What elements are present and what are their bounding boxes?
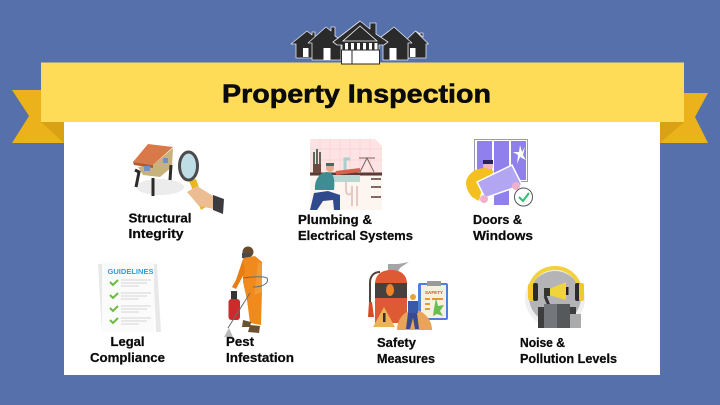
icon: row of houses with shop (291, 21, 428, 64)
icon: house and magnifier (133, 144, 224, 214)
title: Property Inspection (222, 78, 491, 108)
label: Integrity (128, 227, 184, 241)
panel item: safety measures (368, 262, 448, 366)
label: Plumbing & (298, 213, 372, 227)
icon: guidelines checklist: GUIDELINES (108, 267, 154, 276)
label: Windows (473, 229, 533, 243)
label: Pest (226, 335, 255, 349)
panel item: pest infestation (224, 246, 294, 365)
icon: man carrying window (466, 140, 532, 206)
icon: extinguisher and clipboard: SAFETY (425, 290, 443, 295)
label: Electrical Systems (298, 229, 413, 243)
panel item: legal compliance (90, 262, 165, 365)
panel item: plumbing and electrical (298, 139, 413, 243)
panel item: noise and pollution (520, 268, 617, 366)
label: Infestation (226, 351, 294, 365)
label: Pollution Levels (520, 352, 617, 366)
icon: headphones, megaphone, city (525, 268, 585, 328)
panel item: structural integrity (128, 144, 224, 241)
label: Compliance (90, 351, 165, 365)
icon: exterminator with sprayer (224, 246, 267, 337)
white content panel (64, 122, 660, 375)
right ribbon tail (660, 93, 708, 143)
label: Legal (110, 335, 144, 349)
label: Doors & (473, 213, 522, 227)
left ribbon tail (12, 90, 64, 143)
title banner (41, 62, 684, 122)
label: Measures (377, 352, 435, 366)
icon: plumber at sink (310, 139, 382, 210)
label: Safety (377, 336, 416, 350)
label: Structural (128, 211, 192, 225)
panel item: doors and windows (466, 140, 533, 243)
label: Noise & (520, 336, 565, 350)
